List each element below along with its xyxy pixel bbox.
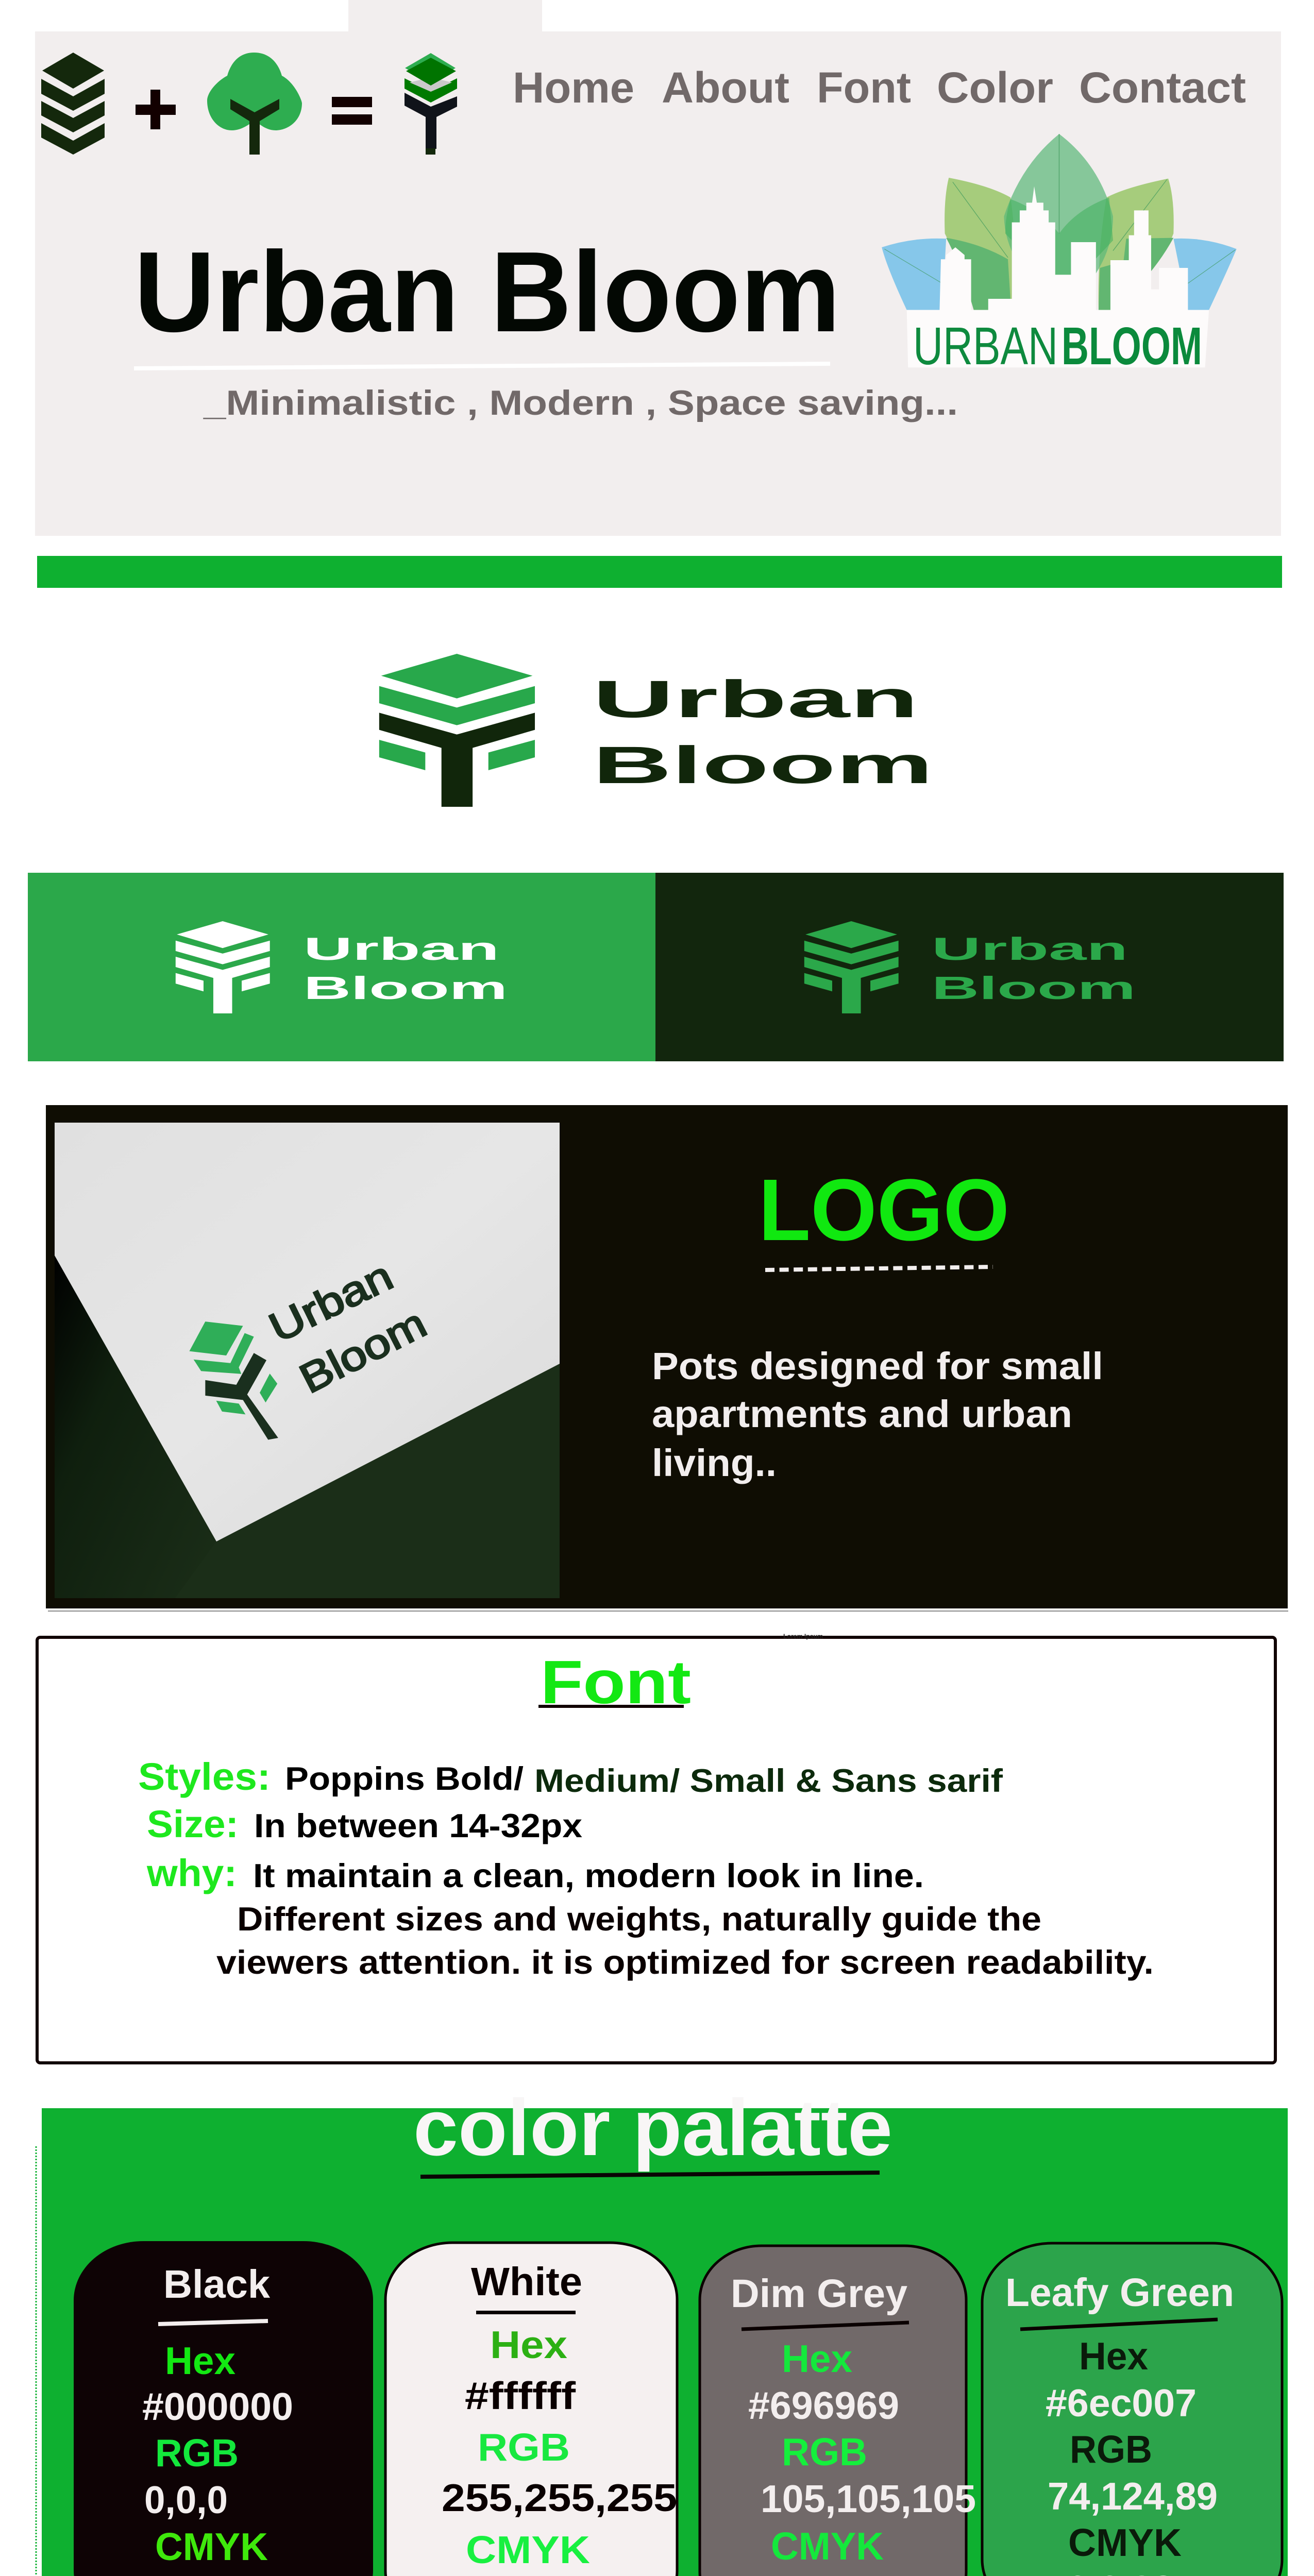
heading: LOGO: LOGO <box>759 1161 1009 1259</box>
tiny placeholder text: Lorem Ipsum <box>783 1633 823 1640</box>
heading dashed underline <box>765 1267 993 1270</box>
cmyk label: CMYK <box>1068 2521 1182 2564</box>
description line 3: living.. <box>652 1442 777 1484</box>
panel: color palette <box>36 2083 1288 2576</box>
nav: Color: Color <box>937 63 1053 112</box>
embossed logo mark <box>189 1321 278 1439</box>
heading: Font: Font <box>541 1648 691 1717</box>
green word: Urban: Urban <box>932 931 1128 967</box>
nav: Home: Home <box>513 63 634 112</box>
white word: Bloom: Bloom <box>304 971 508 1006</box>
rgb value: 0,0,0 <box>144 2478 228 2521</box>
icon: combined logo <box>405 53 457 155</box>
hex value: #6ec007 <box>1046 2381 1197 2425</box>
icon: equals <box>332 97 372 125</box>
green divider bar <box>37 556 1282 588</box>
hex label: Hex <box>165 2339 235 2382</box>
logo word: Bloom: Bloom <box>593 736 933 794</box>
heading underline <box>538 1705 684 1708</box>
header panel <box>35 0 1281 536</box>
rgb value: 74,124,89 <box>1048 2475 1218 2518</box>
name underline <box>158 2321 268 2324</box>
nav: Contact: Contact <box>1079 63 1246 112</box>
name: Black <box>163 2262 270 2307</box>
rgb label: RGB <box>782 2430 867 2473</box>
embossed word: Urban: Urban <box>262 1252 400 1351</box>
title: Urban Bloom <box>134 228 840 356</box>
variant: green background <box>28 873 655 1061</box>
logo word: URBAN: URBAN <box>913 316 1058 376</box>
why line 3: viewers attention. it is optimized for screen readability. <box>216 1943 1154 1981</box>
swatch card: White <box>385 2243 677 2576</box>
name underline <box>476 2311 576 2314</box>
size value: In between 14-32px <box>254 1807 582 1844</box>
name underline <box>1020 2319 1218 2329</box>
hex value: #000000 <box>142 2385 293 2428</box>
name: White <box>471 2260 582 2304</box>
why line 2: Different sizes and weights, naturally guide the <box>237 1900 1041 1938</box>
cmyk label: CMYK <box>771 2524 884 2568</box>
subtitle: _Minimalistic , Modern , Space saving... <box>203 383 958 422</box>
swatch card: Leafy Green <box>982 2243 1282 2576</box>
mockup image: paper on green <box>55 1123 560 1598</box>
logo word: Urban: Urban <box>593 670 919 728</box>
hex value: #ffffff <box>465 2374 576 2417</box>
icon: tree <box>207 53 302 155</box>
rgb value: 255,255,255 <box>442 2476 677 2519</box>
logo mark <box>379 654 535 807</box>
styles value part 2: Medium/ Small & Sans sarif <box>534 1763 1003 1799</box>
description line 1: Pots designed for small <box>652 1345 1103 1387</box>
cmyk label: CMYK <box>155 2525 268 2568</box>
white word: Urban: Urban <box>304 931 499 967</box>
rgb value: 105,105,105 <box>761 2477 976 2520</box>
swatch card: Black <box>74 2241 373 2576</box>
green logo mark <box>804 921 899 1013</box>
name: Leafy Green <box>1005 2270 1234 2315</box>
heading: color palatte: color palatte <box>413 2083 892 2172</box>
rgb label: RGB <box>155 2431 239 2475</box>
description line 2: apartments and urban <box>652 1393 1072 1435</box>
reference logo: leaves and skyline <box>882 134 1237 376</box>
cmyk label: CMYK <box>466 2528 590 2571</box>
label: why: why: <box>146 1852 237 1894</box>
rgb label: RGB <box>478 2426 570 2469</box>
hex label: Hex <box>490 2323 567 2366</box>
styles value part 1: Poppins Bold/ <box>285 1761 524 1797</box>
hex label: Hex <box>1079 2334 1148 2378</box>
hex label: Hex <box>782 2337 852 2380</box>
name: Dim Grey <box>731 2272 907 2316</box>
label: Size: Size: <box>147 1803 239 1845</box>
rgb label: RGB <box>1070 2428 1152 2471</box>
nav: Font: Font <box>817 63 911 112</box>
name underline <box>742 2323 909 2329</box>
icon: stacked chevrons <box>41 53 105 155</box>
why line 1: It maintain a clean, modern look in line. <box>253 1857 924 1894</box>
nav: About: About <box>662 63 789 112</box>
icon: plus <box>136 90 176 129</box>
logo variants band <box>28 873 1284 1061</box>
logo word: BLOOM: BLOOM <box>1062 316 1202 376</box>
hex value: #696969 <box>748 2384 899 2427</box>
label: Styles: Styles: <box>138 1755 271 1798</box>
swatch card: Dim Grey <box>700 2246 976 2576</box>
primary logo <box>379 654 933 807</box>
panel: logo mockup <box>46 1105 1288 1611</box>
white logo mark <box>176 921 270 1013</box>
variant: dark background <box>655 873 1284 1061</box>
embossed word: Bloom: Bloom <box>292 1300 433 1402</box>
panel: font <box>37 1633 1275 2063</box>
green word: Bloom: Bloom <box>932 971 1136 1006</box>
title underline <box>134 362 830 370</box>
heading underline <box>420 2173 880 2177</box>
